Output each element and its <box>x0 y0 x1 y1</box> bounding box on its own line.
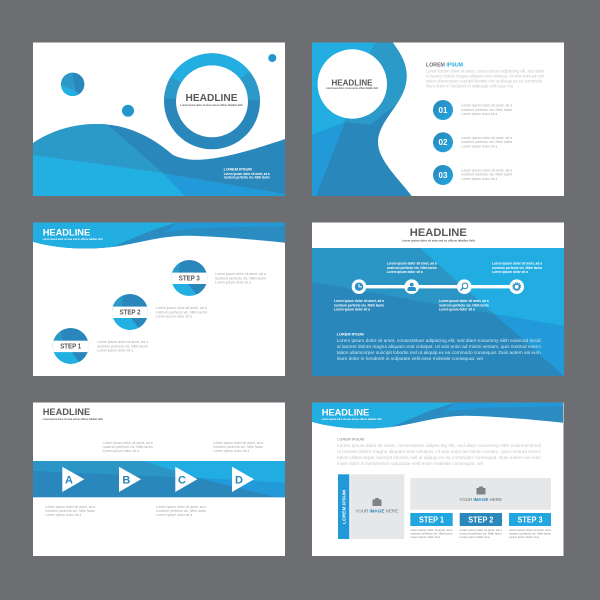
step 1 box: nostrum perfecto vis. Nibh lacim <box>410 532 452 536</box>
panel: numbered list slide <box>312 42 564 196</box>
headline: HEADLINE <box>332 78 373 87</box>
label bottom 2: Lorem ipsum dolor sit amet, ad a <box>439 299 489 303</box>
body text: tation ullamcorper suscipit lobortis nisl ut aliquip ex ea commodo consequat. Duis autem vel eum <box>337 350 541 356</box>
subheadline: Lorem ipsum dolor sit area sed ac officus fabellas Velit <box>180 103 243 107</box>
text bottom 2 <box>156 505 206 517</box>
step 3 box: STEP 3 <box>518 516 543 524</box>
blue background <box>312 248 564 376</box>
icon: small dot <box>268 54 276 62</box>
item 01: nostrum perfecto vis. Nibh lacim <box>461 108 512 112</box>
step 2: STEP 2 <box>120 310 141 317</box>
subheadline: Lorem ipsum dolor sit area sed ac officus fabellas Velit <box>43 237 103 241</box>
step 3: nostrum perfecto vis. Nibh lacim <box>215 276 266 280</box>
step 3 box <box>509 513 552 539</box>
step 1 box: Lorem ipsum dolor sit a <box>410 535 441 539</box>
intro text: iriure dolor in hendrerit in vulputate velit esse mo <box>426 84 513 90</box>
arrow B: B <box>122 474 130 486</box>
image placeholder left <box>350 474 404 539</box>
vertical label bar <box>338 474 349 539</box>
step 1: Lorem ipsum dolor sit a <box>97 348 133 352</box>
body text: iriure dolor in hendrerit in vulputate velit esse molestie consequat, vel <box>337 356 483 362</box>
curved blue shape <box>312 42 412 196</box>
arrow A: A <box>65 474 73 486</box>
text bottom 1: Lorem ipsum dolor sit a <box>45 513 81 517</box>
icon: camera <box>372 498 382 506</box>
body text: ut laoreet dolore magna aliquam erat volutpat. Ut wisi enim ad minim veniam, quis nostrud exerci <box>337 344 541 350</box>
intro text: tation ullamcorper suscipit lobortis nisl ut aliquip ex ea commodo <box>426 78 542 84</box>
icon: large dot <box>60 72 84 96</box>
item 02: 02 <box>439 138 448 147</box>
step 1 box <box>410 513 453 539</box>
item 02: Lorem ipsum dolor sit a <box>461 144 497 148</box>
intro text: ut laoreet dolore magna aliquam erat volutpat. Ut wisi enim ad min <box>426 73 544 79</box>
headline circle <box>318 49 387 119</box>
body text <box>337 438 541 467</box>
label bottom 1: Lorem ipsum dolor sit amet, ad a <box>334 299 384 303</box>
label bottom 1: nostrum perfecto vis. Nibh lacim <box>334 304 384 308</box>
step 2 box: STEP 2 <box>468 516 494 524</box>
body text: LOREM IPSUM <box>337 438 364 442</box>
item 02 <box>433 132 512 152</box>
subheadline: Lorem ipsum dolor sit area sed ac officus fabellas Velit <box>402 238 475 242</box>
step 1: STEP 1 <box>60 344 81 351</box>
text bottom 2: Lorem ipsum dolor sit a <box>156 513 192 517</box>
icon: camera <box>476 486 486 494</box>
image placeholder right: YOUR IMAGE HERE <box>459 497 502 502</box>
text top 1: Lorem ipsum dolor sit a <box>103 449 139 453</box>
arrow C: C <box>178 474 186 486</box>
text top 1 <box>103 441 153 453</box>
item 01 <box>433 100 512 120</box>
intro text <box>426 68 544 90</box>
item 01: Lorem ipsum dolor sit amet, ad a <box>461 104 512 108</box>
body text: Lorem ipsum dolor sit amet, consectetuer adipiscing elit, sed diam nonummy nibh euismod tincid <box>337 443 541 449</box>
header wave <box>312 402 563 428</box>
intro heading: LOREM IPSUM <box>426 63 464 69</box>
panel: image placeholders slide <box>312 402 564 556</box>
panel: cover slide <box>33 42 285 196</box>
step 3 box: Lorem ipsum dolor sit amet, ad a <box>509 528 552 532</box>
step 1 box: STEP 1 <box>419 516 445 524</box>
icon: person <box>404 279 419 294</box>
body text: tation ullamcorper suscipit lobortis nisl ut aliquip ex ea commodo consequat. Duis autem vel eum <box>337 455 541 461</box>
text top 2: Lorem ipsum dolor sit a <box>213 449 249 453</box>
step 2: Lorem ipsum dolor sit amet, ad a <box>156 306 207 310</box>
intro text: Lorem ipsum dolor sit amet, consectetuer adipiscing elit, sed diam <box>426 68 544 74</box>
caption: nostrum perfecto vis. Nibh lacim <box>224 176 270 180</box>
label top 1 <box>387 262 437 274</box>
item 01: 01 <box>439 106 448 115</box>
step 2 box: Lorem ipsum dolor sit a <box>460 535 490 539</box>
label top 2: Lorem ipsum dolor sit a <box>492 270 528 274</box>
step 2: nostrum perfecto vis. Nibh lacim <box>156 310 207 314</box>
text top 1: Lorem ipsum dolor sit amet, ad a <box>103 441 153 445</box>
step 2 box <box>460 513 502 539</box>
item 01: Lorem ipsum dolor sit a <box>461 112 497 116</box>
headline: HEADLINE <box>410 227 467 239</box>
caption: Lorem ipsum dolor sit amet, ad a <box>224 172 270 176</box>
headline: HEADLINE <box>43 226 90 238</box>
subheadline: Lorem ipsum dolor sit area sed ac officus fabellas Velit <box>43 417 103 421</box>
text top 2: Lorem ipsum dolor sit amet, ad a <box>213 441 263 445</box>
label top 2: nostrum perfecto vis. Nibh lacim <box>492 266 542 270</box>
subheadline: Lorem ipsum dolor sit area sed ac officus fabellas Velit <box>326 86 378 90</box>
step 1: Lorem ipsum dolor sit amet, ad a <box>97 340 148 344</box>
label bottom 2: Lorem ipsum dolor sit a <box>439 308 475 312</box>
panel: ABCD process slide <box>33 402 285 556</box>
item 03: 03 <box>439 171 448 180</box>
text top 1: nostrum perfecto vis. Nibh lacim <box>103 445 153 449</box>
text bottom 2: Lorem ipsum dolor sit amet, ad a <box>156 505 206 509</box>
label top 1: nostrum perfecto vis. Nibh lacim <box>387 266 437 270</box>
label bottom 2 <box>439 299 489 312</box>
step 3 box: Lorem ipsum dolor sit a <box>509 535 540 539</box>
item 03: nostrum perfecto vis. Nibh lacim <box>461 173 512 177</box>
wave shape <box>33 120 285 196</box>
step 2 <box>111 294 207 330</box>
label top 1: Lorem ipsum dolor sit amet, ad a <box>387 262 437 266</box>
label top 2: Lorem ipsum dolor sit amet, ad a <box>492 262 542 266</box>
panel: timeline slide <box>312 222 564 376</box>
text bottom 1 <box>45 505 95 517</box>
item 02: Lorem ipsum dolor sit amet, ad a <box>461 136 512 140</box>
step 3 box: nostrum perfecto vis. Nibh lacim <box>509 532 551 536</box>
process band <box>33 461 285 497</box>
icon: magnifier <box>457 279 472 294</box>
caption <box>224 167 270 180</box>
subheadline: Lorem ipsum dolor sit area sed ac officus fabellas Velit <box>322 417 382 421</box>
headline ring <box>164 53 260 150</box>
panel: steps slide <box>33 222 285 376</box>
icon: clock <box>352 279 366 294</box>
headline: HEADLINE <box>43 406 90 417</box>
arrow C <box>175 467 197 492</box>
arrow D <box>232 467 254 492</box>
label top 1: Lorem ipsum dolor sit a <box>387 270 423 274</box>
step 1 <box>52 328 148 364</box>
item 03 <box>433 165 512 185</box>
text bottom 1: nostrum perfecto vis. Nibh lacim <box>45 509 95 513</box>
item 03: Lorem ipsum dolor sit amet, ad a <box>461 168 512 172</box>
arrow B <box>119 467 141 492</box>
step 1: nostrum perfecto vis. Nibh lacim <box>97 344 148 348</box>
headline: HEADLINE <box>186 93 238 104</box>
timeline <box>352 279 524 294</box>
step 2 box: Lorem ipsum dolor sit amet, ad a <box>460 528 502 532</box>
icon: medium dot <box>122 105 134 117</box>
image placeholder right <box>410 478 551 510</box>
header wave <box>33 222 285 248</box>
label bottom 1: Lorem ipsum dolor sit a <box>334 308 370 312</box>
text top 2: nostrum perfecto vis. Nibh lacim <box>213 445 263 449</box>
icon: gear <box>509 279 524 294</box>
text top 2 <box>213 441 263 453</box>
arrow A <box>62 467 84 492</box>
label top 2 <box>492 262 542 274</box>
text bottom 2: nostrum perfecto vis. Nibh lacim <box>156 509 206 513</box>
headline: HEADLINE <box>322 406 369 418</box>
body text: Lorem ipsum dolor sit amet, consectetuer adipiscing elit, sed diam nonummy nibh euismod tincid <box>337 338 541 344</box>
image placeholder left: YOUR IMAGE HERE <box>355 508 398 514</box>
vertical label bar: LOREM IPSUM <box>342 490 346 524</box>
label bottom 2: nostrum perfecto vis. Nibh lacim <box>439 304 489 308</box>
step 1 box: Lorem ipsum dolor sit amet, ad a <box>410 528 453 532</box>
label bottom 1 <box>334 299 384 312</box>
text bottom 1: Lorem ipsum dolor sit amet, ad a <box>45 505 95 509</box>
body text: LOREM IPSUM <box>337 332 364 336</box>
step 2 box: nostrum perfecto vis. Nibh lacim <box>460 532 502 536</box>
step 3: STEP 3 <box>179 276 200 283</box>
item 02: nostrum perfecto vis. Nibh lacim <box>461 140 512 144</box>
arrow D: D <box>235 474 243 486</box>
body text: iriure dolor in hendrerit in vulputate velit esse molestie consequat, vel <box>337 461 483 467</box>
body text: ut laoreet dolore magna aliquam erat volutpat. Ut wisi enim ad minim veniam, quis nostrud exerci <box>337 449 541 455</box>
step 2: Lorem ipsum dolor sit a <box>156 314 192 318</box>
body text <box>337 332 541 362</box>
step 3: Lorem ipsum dolor sit amet, ad a <box>215 272 266 276</box>
item 03: Lorem ipsum dolor sit a <box>461 177 497 181</box>
caption: LOREM IPSUM <box>224 167 252 171</box>
step 3: Lorem ipsum dolor sit a <box>215 280 251 284</box>
step 3 <box>170 260 266 296</box>
